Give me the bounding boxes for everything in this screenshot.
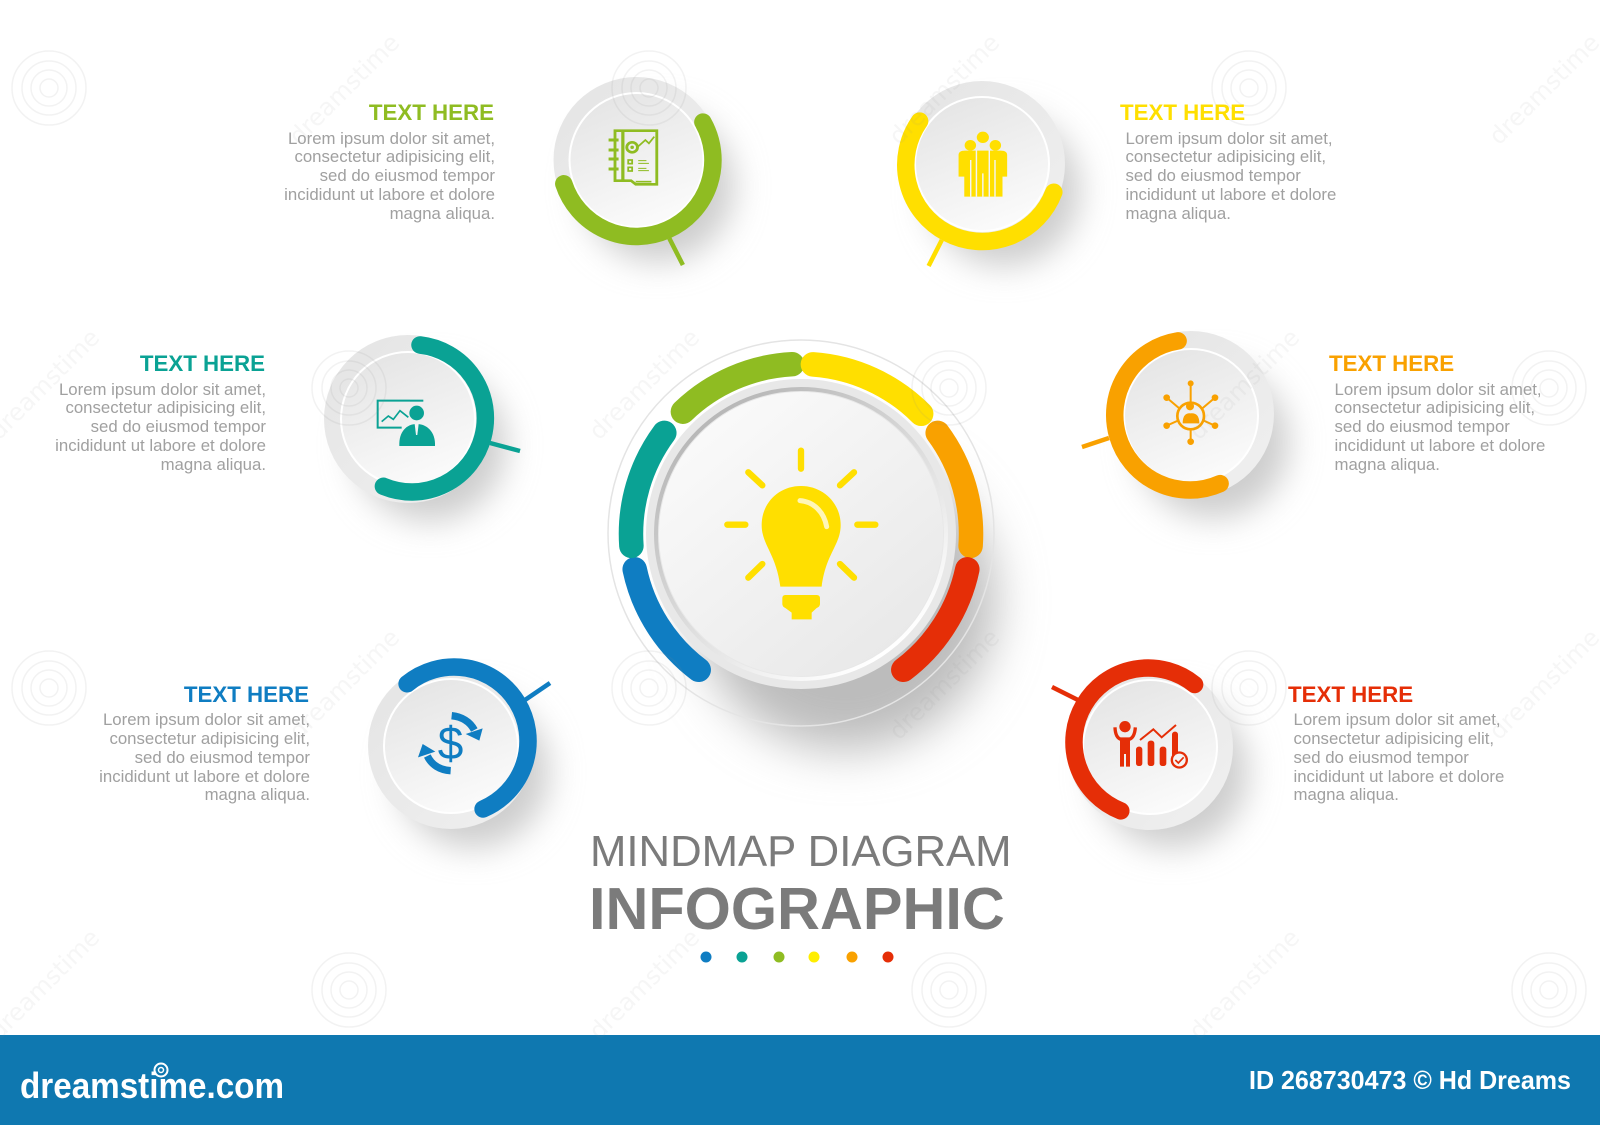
text block: teal: magna aliqua. xyxy=(161,455,266,474)
watermark text: dreamstime xyxy=(883,28,1005,150)
node: green notebook xyxy=(554,77,734,265)
icon: team of people xyxy=(959,132,1007,197)
icon: light bulb xyxy=(727,451,875,619)
text block: orange xyxy=(1329,351,1545,474)
text block: teal: sed do eiusmod tempor xyxy=(91,417,266,436)
text block: green: consectetur adipisicing elit, xyxy=(294,147,495,166)
yellow ring arc xyxy=(906,121,1054,241)
node: blue money xyxy=(368,663,550,848)
node: orange network xyxy=(1082,331,1289,518)
footer logo: dreamstime.com xyxy=(20,1065,284,1106)
node: teal presenter xyxy=(324,335,520,521)
text block: yellow: TEXT HERE xyxy=(1120,100,1245,125)
text block: blue: TEXT HERE xyxy=(184,682,309,707)
text block: red: incididunt ut labore et dolore xyxy=(1294,767,1504,786)
text block: green: incididunt ut labore et dolore xyxy=(284,185,495,204)
footer credit: ID 268730473 © Hd Dreams xyxy=(1249,1065,1571,1095)
icon: notebook xyxy=(609,131,657,184)
text block: red xyxy=(1288,682,1504,804)
watermark text: dreamstime xyxy=(583,923,705,1045)
dollar sign: $ xyxy=(438,717,463,769)
watermark text: dreamstime xyxy=(883,623,1005,745)
text block: teal: incididunt ut labore et dolore xyxy=(55,436,266,455)
title line 2: INFOGRAPHIC xyxy=(589,875,1005,942)
text block: teal: TEXT HERE xyxy=(140,351,265,376)
text block: orange: TEXT HERE xyxy=(1329,351,1454,376)
text block: blue: Lorem ipsum dolor sit amet, xyxy=(103,710,310,729)
red ring arc xyxy=(1074,668,1195,811)
orange pointer xyxy=(1082,438,1109,447)
hub segment: blue xyxy=(635,569,699,670)
red pointer xyxy=(1052,687,1078,700)
icon: person with growth chart xyxy=(1115,721,1188,769)
text block: orange: magna aliqua. xyxy=(1334,455,1440,474)
watermark text: dreamstime xyxy=(583,323,705,445)
text block: teal: Lorem ipsum dolor sit amet, xyxy=(59,380,266,399)
hub segment: teal xyxy=(631,433,664,546)
watermark text: dreamstime xyxy=(1183,323,1305,445)
green ring arc xyxy=(564,122,713,236)
hub segment: green xyxy=(683,364,792,412)
blue ring arc xyxy=(407,667,528,809)
text block: green: sed do eiusmod tempor xyxy=(320,166,495,185)
text block: yellow: Lorem ipsum dolor sit amet, xyxy=(1126,129,1333,148)
text block: red: TEXT HERE xyxy=(1288,682,1413,707)
text block: blue xyxy=(99,682,310,804)
icon: network hub xyxy=(1163,380,1218,445)
text block: blue: incididunt ut labore et dolore xyxy=(99,767,310,786)
text block: blue: consectetur adipisicing elit, xyxy=(109,729,310,748)
teal pointer xyxy=(490,443,520,451)
text block: teal xyxy=(55,351,266,474)
text block: red: sed do eiusmod tempor xyxy=(1294,748,1469,767)
icon: dollar exchange xyxy=(418,716,483,771)
orange ring arc xyxy=(1115,341,1220,490)
text block: orange: sed do eiusmod tempor xyxy=(1334,417,1510,436)
node: yellow team xyxy=(899,81,1080,266)
teal ring arc xyxy=(383,345,485,492)
text block: yellow: sed do eiusmod tempor xyxy=(1126,166,1301,185)
title accent dots xyxy=(700,952,894,962)
text block: yellow: consectetur adipisicing elit, xyxy=(1126,147,1326,166)
icon: presenter with chart xyxy=(378,401,435,446)
text block: red: Lorem ipsum dolor sit amet, xyxy=(1294,710,1501,729)
watermark text: dreamstime xyxy=(283,28,405,150)
node: red growth xyxy=(1052,664,1248,848)
text block: red: consectetur adipisicing elit, xyxy=(1294,729,1494,748)
text block: blue: magna aliqua. xyxy=(205,785,310,804)
text block: green xyxy=(284,100,495,223)
text block: red: magna aliqua. xyxy=(1294,785,1399,804)
watermark text: dreamstime xyxy=(283,623,405,745)
text block: green: Lorem ipsum dolor sit amet, xyxy=(288,129,495,148)
hub segment: red xyxy=(903,569,967,670)
blue pointer xyxy=(525,683,550,700)
text block: orange: consectetur adipisicing elit, xyxy=(1334,398,1535,417)
green pointer xyxy=(669,238,683,265)
text block: orange: Lorem ipsum dolor sit amet, xyxy=(1334,380,1542,399)
hub segment: orange xyxy=(938,433,971,546)
text block: orange: incididunt ut labore et dolore xyxy=(1334,436,1545,455)
text block: yellow: incididunt ut labore et dolore xyxy=(1126,185,1336,204)
footer band xyxy=(0,1035,1600,1125)
watermark text: dreamstime xyxy=(1183,923,1305,1045)
central hub xyxy=(608,340,995,750)
hub segment: yellow xyxy=(813,364,921,414)
text block: yellow: magna aliqua. xyxy=(1126,204,1231,223)
yellow pointer xyxy=(929,240,942,266)
text block: yellow xyxy=(1120,100,1336,223)
text block: blue: sed do eiusmod tempor xyxy=(135,748,310,767)
text block: teal: consectetur adipisicing elit, xyxy=(65,398,266,417)
text block: green: TEXT HERE xyxy=(369,100,494,125)
text block: green: magna aliqua. xyxy=(390,204,495,223)
title line 1: MINDMAP DIAGRAM xyxy=(590,827,1012,876)
